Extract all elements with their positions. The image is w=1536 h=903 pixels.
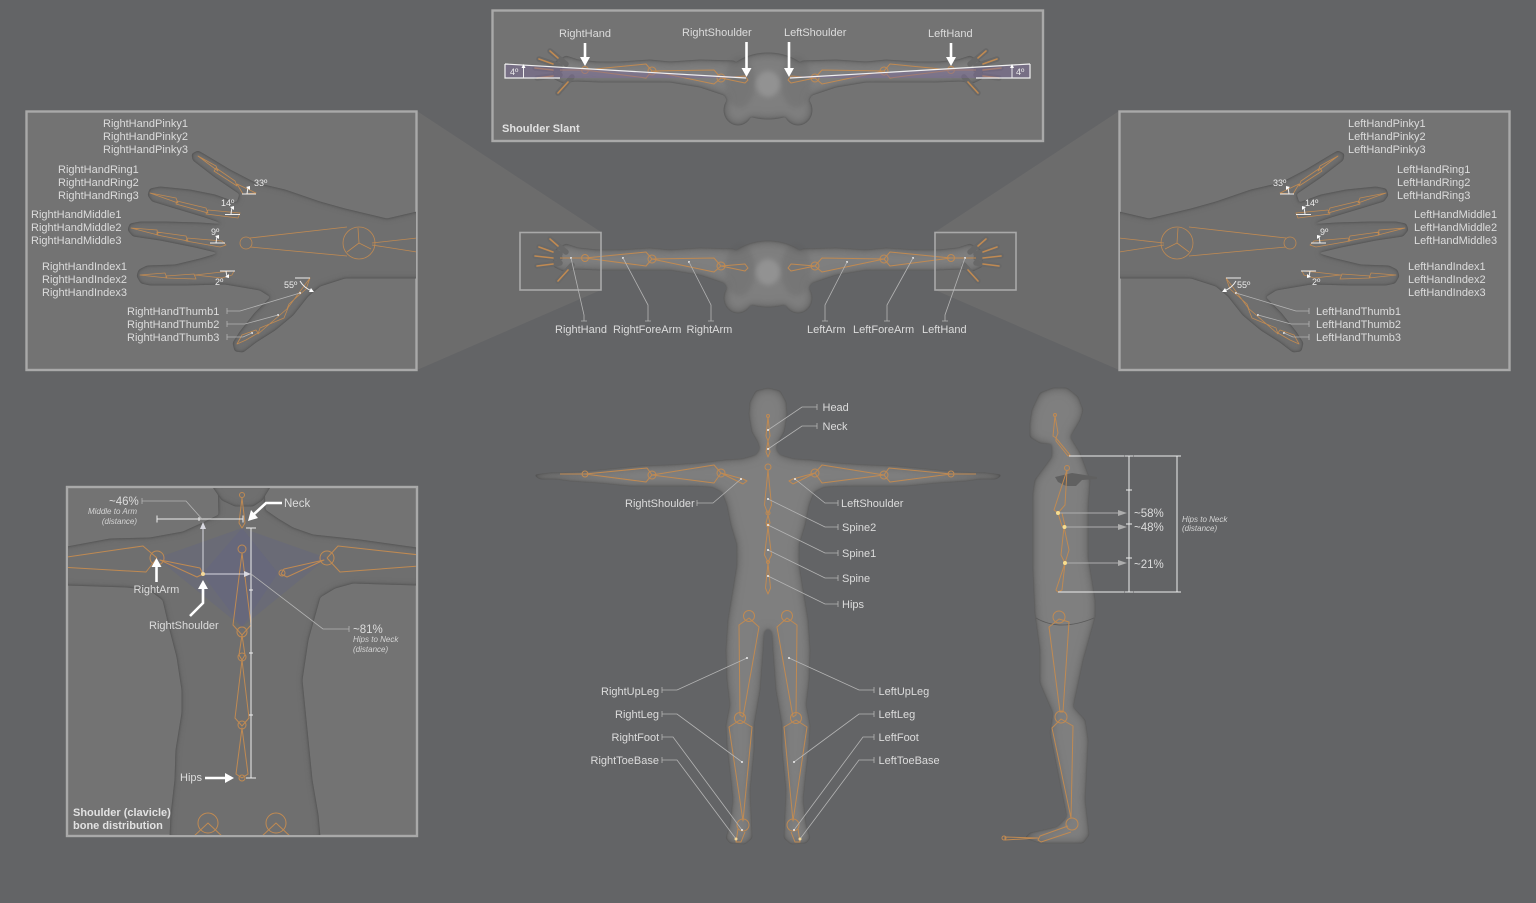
- arrow: RightShoulder: [742, 42, 752, 77]
- label: LeftShoulder: LeftShoulder: [784, 27, 847, 39]
- label: RightFoot: RightFoot: [612, 732, 659, 744]
- labels: finger angles: 55º: [284, 280, 298, 290]
- wedge: left shoulder slant: [505, 64, 746, 78]
- labels: index: LeftHandIndex3: [1408, 287, 1486, 299]
- shaded clavicle diamonds: [204, 528, 278, 626]
- labels: ring: RightHandRing2: [58, 177, 139, 189]
- labels: ring: [1397, 164, 1470, 202]
- labels: middle: [31, 209, 122, 247]
- labels: finger angles: 9º: [211, 227, 220, 237]
- bones: [60, 492, 420, 838]
- arrow: RightArm: [152, 558, 162, 582]
- labels: ring: RightHandRing1: [58, 164, 139, 176]
- labels: index: LeftHandIndex1: [1408, 261, 1486, 273]
- labels: thumb: RightHandThumb3: [127, 332, 219, 344]
- arrow: Hips: [205, 773, 234, 783]
- wedge: right shoulder slant: [790, 64, 1030, 78]
- figure: front view: [534, 388, 1002, 844]
- label: RightShoulder: RightShoulder: [149, 620, 219, 632]
- labels: middle: [1414, 209, 1497, 247]
- labels: index: [42, 261, 127, 299]
- figure: top view in shoulder slant panel: [535, 51, 1001, 125]
- labels: pinky: LeftHandPinky1: [1348, 118, 1426, 130]
- zoom cone: right hand panel to left-hand box: [935, 111, 1119, 370]
- inset box: right hand: [520, 232, 601, 290]
- labels: index: [1408, 261, 1486, 299]
- labels: finger angles: [1237, 178, 1329, 290]
- leader: RightHand: [570, 257, 587, 321]
- labels: pinky: RightHandPinky1: [103, 118, 188, 130]
- callout: middle to arm: [88, 496, 139, 526]
- skeleton: side view: [1002, 414, 1078, 842]
- label: LeftForeArm: LeftForeArm: [853, 324, 914, 336]
- label: 58 percent: ~58%: [1134, 508, 1164, 520]
- labels: ring: LeftHandRing2: [1397, 177, 1470, 189]
- leader: LeftForeArm: [884, 257, 914, 321]
- labels: thumb: [1316, 306, 1401, 344]
- panel: shoulder slant: [492, 10, 1043, 141]
- label: 48 percent: ~48%: [1134, 522, 1164, 534]
- torso illustration: [68, 488, 416, 835]
- leader: LeftHand: [942, 257, 966, 321]
- panel: left hand detail: [1086, 112, 1510, 370]
- label: Spine2: Spine2: [842, 522, 876, 534]
- wedge: right shoulder slant: 4º: [1016, 67, 1025, 77]
- labels: middle: LeftHandMiddle2: [1414, 222, 1497, 234]
- zoom cone: left hand panel to right-hand box: [417, 111, 601, 370]
- labels: thumb: LeftHandThumb3: [1316, 332, 1401, 344]
- label: LeftArm: LeftArm: [807, 324, 846, 336]
- panel title second line: bone distribution: [73, 820, 163, 832]
- labels: pinky: LeftHandPinky3: [1348, 144, 1426, 156]
- arm labels and leaders: [555, 257, 967, 336]
- label: hips to neck distance: Hips to Neck: [1182, 515, 1228, 524]
- panel: right hand detail: [26, 112, 450, 370]
- label: 21 percent: ~21%: [1134, 559, 1164, 571]
- labels: pinky: RightHandPinky3: [103, 144, 188, 156]
- labels: middle: RightHandMiddle1: [31, 209, 122, 221]
- measurements: [142, 498, 349, 778]
- labels: finger angles: 33º: [254, 178, 268, 188]
- skeleton: front view: [560, 414, 976, 842]
- label: RightLeg: RightLeg: [615, 709, 659, 721]
- labels: pinky: [1348, 118, 1426, 156]
- label: RightArm: RightArm: [686, 324, 732, 336]
- label: RightShoulder: RightShoulder: [682, 27, 752, 39]
- arrow: LeftShoulder: [784, 42, 794, 77]
- labels: ring: LeftHandRing1: [1397, 164, 1470, 176]
- labels: thumb: RightHandThumb2: [127, 319, 219, 331]
- callout: middle to arm: (distance): [102, 517, 137, 526]
- labels: middle: LeftHandMiddle1: [1414, 209, 1497, 221]
- labels: finger angles: 55º: [1237, 280, 1251, 290]
- labels: index: RightHandIndex3: [42, 287, 127, 299]
- label: Head: Head: [822, 402, 849, 414]
- label: Spine: Spine: [842, 573, 870, 585]
- panel title: Shoulder Slant: [502, 123, 580, 135]
- labels: thumb: LeftHandThumb1: [1316, 306, 1401, 318]
- arrow: Neck: [248, 503, 282, 521]
- leader: RightForeArm: [622, 257, 651, 321]
- label: Spine1: Spine1: [842, 548, 876, 560]
- panel: shoulder clavicle bone distribution: [66, 486, 418, 838]
- label: Neck: Neck: [284, 498, 310, 510]
- arrow: RightShoulder: [190, 580, 208, 616]
- labels: middle: LeftHandMiddle3: [1414, 235, 1497, 247]
- wedge: left shoulder slant: 4º: [510, 67, 519, 77]
- labels: pinky: RightHandPinky2: [103, 131, 188, 143]
- labels: ring: LeftHandRing3: [1397, 190, 1470, 202]
- labels: finger angles: 14º: [1305, 198, 1319, 208]
- measurements: side view: [1056, 456, 1181, 592]
- labels: middle: RightHandMiddle2: [31, 222, 122, 234]
- label: LeftHand: LeftHand: [928, 28, 973, 40]
- label: RightUpLeg: RightUpLeg: [601, 686, 659, 698]
- labels: pinky: [103, 118, 188, 156]
- label: hips to neck distance: [1182, 515, 1228, 533]
- labels: finger angles: 9º: [1320, 227, 1329, 237]
- label: Hips: Hips: [180, 772, 203, 784]
- label: hips to neck distance: (distance): [1182, 524, 1217, 533]
- figure: top view with arms: [535, 239, 1001, 313]
- labels: index: RightHandIndex2: [42, 274, 127, 286]
- label: LeftLeg: LeftLeg: [878, 709, 915, 721]
- label: RightArm: RightArm: [134, 584, 179, 596]
- label: RightHand: RightHand: [555, 324, 607, 336]
- leader: LeftArm: [822, 261, 848, 321]
- inset box: left hand: [935, 232, 1016, 290]
- callout: hips to neck: (distance): [353, 645, 388, 654]
- labels: finger angles: 14º: [221, 198, 235, 208]
- label: LeftFoot: LeftFoot: [878, 732, 919, 744]
- labels: thumb: LeftHandThumb2: [1316, 319, 1401, 331]
- labels: index: LeftHandIndex2: [1408, 274, 1486, 286]
- side-view hand silhouette: [1055, 473, 1097, 486]
- label: RightHand: RightHand: [559, 28, 611, 40]
- labels: index: RightHandIndex1: [42, 261, 127, 273]
- arrow: RightHand: [580, 43, 590, 66]
- callout: middle to arm: ~46%: [109, 496, 139, 508]
- label: RightToeBase: RightToeBase: [590, 755, 659, 767]
- labels: thumb: [127, 306, 219, 344]
- labels: ring: RightHandRing3: [58, 190, 139, 202]
- leader: RightArm: [688, 261, 714, 321]
- leaders: front view: [662, 404, 874, 840]
- labels: thumb: RightHandThumb1: [127, 306, 219, 318]
- label: Hips: Hips: [842, 599, 865, 611]
- label: RightShoulder: RightShoulder: [625, 498, 695, 510]
- callout: hips to neck: ~81%: [353, 624, 383, 636]
- label: Neck: Neck: [822, 421, 848, 433]
- panel title: Shoulder (clavicle): [73, 807, 171, 819]
- hand illustration: right hand: [128, 151, 450, 352]
- label: LeftShoulder: LeftShoulder: [841, 498, 904, 510]
- callout: middle to arm: Middle to Arm: [88, 507, 137, 516]
- labels: finger angles: [211, 178, 298, 290]
- hand illustration: left hand: [1086, 151, 1408, 352]
- label: LeftHand: LeftHand: [922, 324, 967, 336]
- label: LeftToeBase: LeftToeBase: [878, 755, 940, 767]
- arrow: LeftHand: [946, 43, 956, 66]
- callout: hips to neck: [353, 624, 399, 654]
- labels: ring: [58, 164, 139, 202]
- labels: finger angles: 2º: [215, 277, 224, 287]
- label: RightForeArm: RightForeArm: [613, 324, 681, 336]
- labels: finger angles: 2º: [1312, 277, 1321, 287]
- figure: side view: [1002, 388, 1228, 843]
- label: LeftUpLeg: LeftUpLeg: [878, 686, 929, 698]
- labels: pinky: LeftHandPinky2: [1348, 131, 1426, 143]
- labels: finger angles: 33º: [1273, 178, 1287, 188]
- labels: middle: RightHandMiddle3: [31, 235, 122, 247]
- callout: hips to neck: Hips to Neck: [353, 635, 399, 644]
